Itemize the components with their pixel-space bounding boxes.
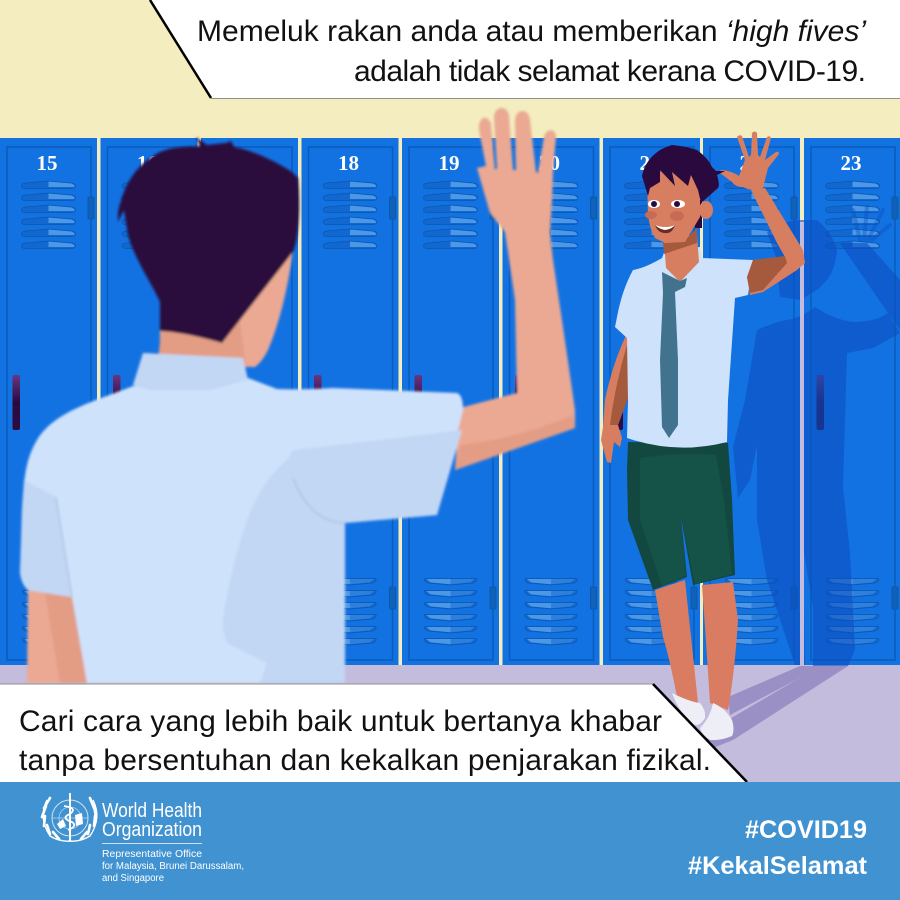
locker 23 [804, 138, 900, 665]
top caption text: Memeluk rakan anda atau memberikan ‘high fives’ [197, 15, 867, 48]
hashtags: #COVID19 [745, 816, 867, 844]
hashtags: #KekalSelamat [688, 852, 868, 880]
raised arm [747, 188, 805, 295]
top caption panel [150, 0, 900, 98]
left arm [601, 333, 629, 463]
locker 17: 17 [238, 151, 258, 175]
WHO logo [42, 793, 244, 884]
wall background [0, 0, 900, 140]
shoes [672, 693, 734, 740]
organisation name: World Health [102, 800, 202, 822]
floor shadow [700, 666, 848, 748]
bottom caption text: Cari cara yang lebih baik untuk bertanya khabar [19, 705, 662, 738]
bottom caption text [19, 705, 711, 777]
bottom caption panel [0, 684, 747, 782]
hair back [695, 200, 702, 228]
organisation name: Organization [102, 819, 202, 841]
locker 19: 19 [438, 151, 460, 175]
locker 21: 21 [640, 151, 660, 175]
neck and jaw [158, 250, 293, 368]
locker 16: 16 [137, 151, 158, 175]
mouth [655, 225, 675, 233]
footer bar [0, 782, 900, 900]
top caption text [197, 15, 867, 88]
bottom caption text: tanpa bersentuhan dan kekalkan penjarakan fizikal. [19, 744, 711, 777]
hair [642, 145, 725, 203]
ear [699, 201, 713, 219]
locker 22: 22 [740, 151, 760, 175]
cheeks [645, 211, 684, 221]
hashtags [688, 816, 868, 880]
wall shadow of student [733, 207, 900, 666]
face [647, 170, 700, 243]
locker 18: 18 [338, 151, 359, 175]
top caption text: adalah tidak selamat kerana COVID-19. [354, 55, 866, 88]
locker 19 [402, 138, 499, 665]
foreground student from behind [20, 108, 575, 683]
left arm [27, 590, 87, 683]
shorts [627, 442, 735, 590]
floor [0, 665, 900, 783]
legs [655, 580, 738, 710]
student waving in background [601, 132, 805, 740]
neck [663, 228, 699, 282]
eyes [648, 200, 685, 208]
lockers wall [0, 138, 900, 665]
organisation name [102, 800, 244, 884]
locker 21 [603, 138, 700, 665]
locker 15: 15 [36, 151, 58, 175]
icon: WHO emblem [42, 793, 97, 841]
organisation name: for Malaysia, Brunei Darussalam, [102, 861, 244, 872]
locker 20: 20 [539, 151, 560, 175]
hair [118, 137, 302, 343]
forearm and hand [455, 108, 575, 470]
locker 23: 23 [840, 151, 862, 175]
locker 22 [703, 138, 800, 665]
shirt [615, 247, 753, 448]
locker 15 [0, 138, 97, 665]
raised hand [720, 132, 779, 190]
organisation name: Representative Office [102, 849, 202, 860]
locker 17 [201, 138, 298, 665]
organisation name: and Singapore [102, 873, 164, 884]
shirt [20, 353, 463, 683]
locker 16 [100, 138, 198, 665]
locker 18 [302, 138, 398, 665]
locker gap [800, 222, 804, 665]
locker 20 [502, 138, 600, 665]
necktie [660, 272, 687, 438]
